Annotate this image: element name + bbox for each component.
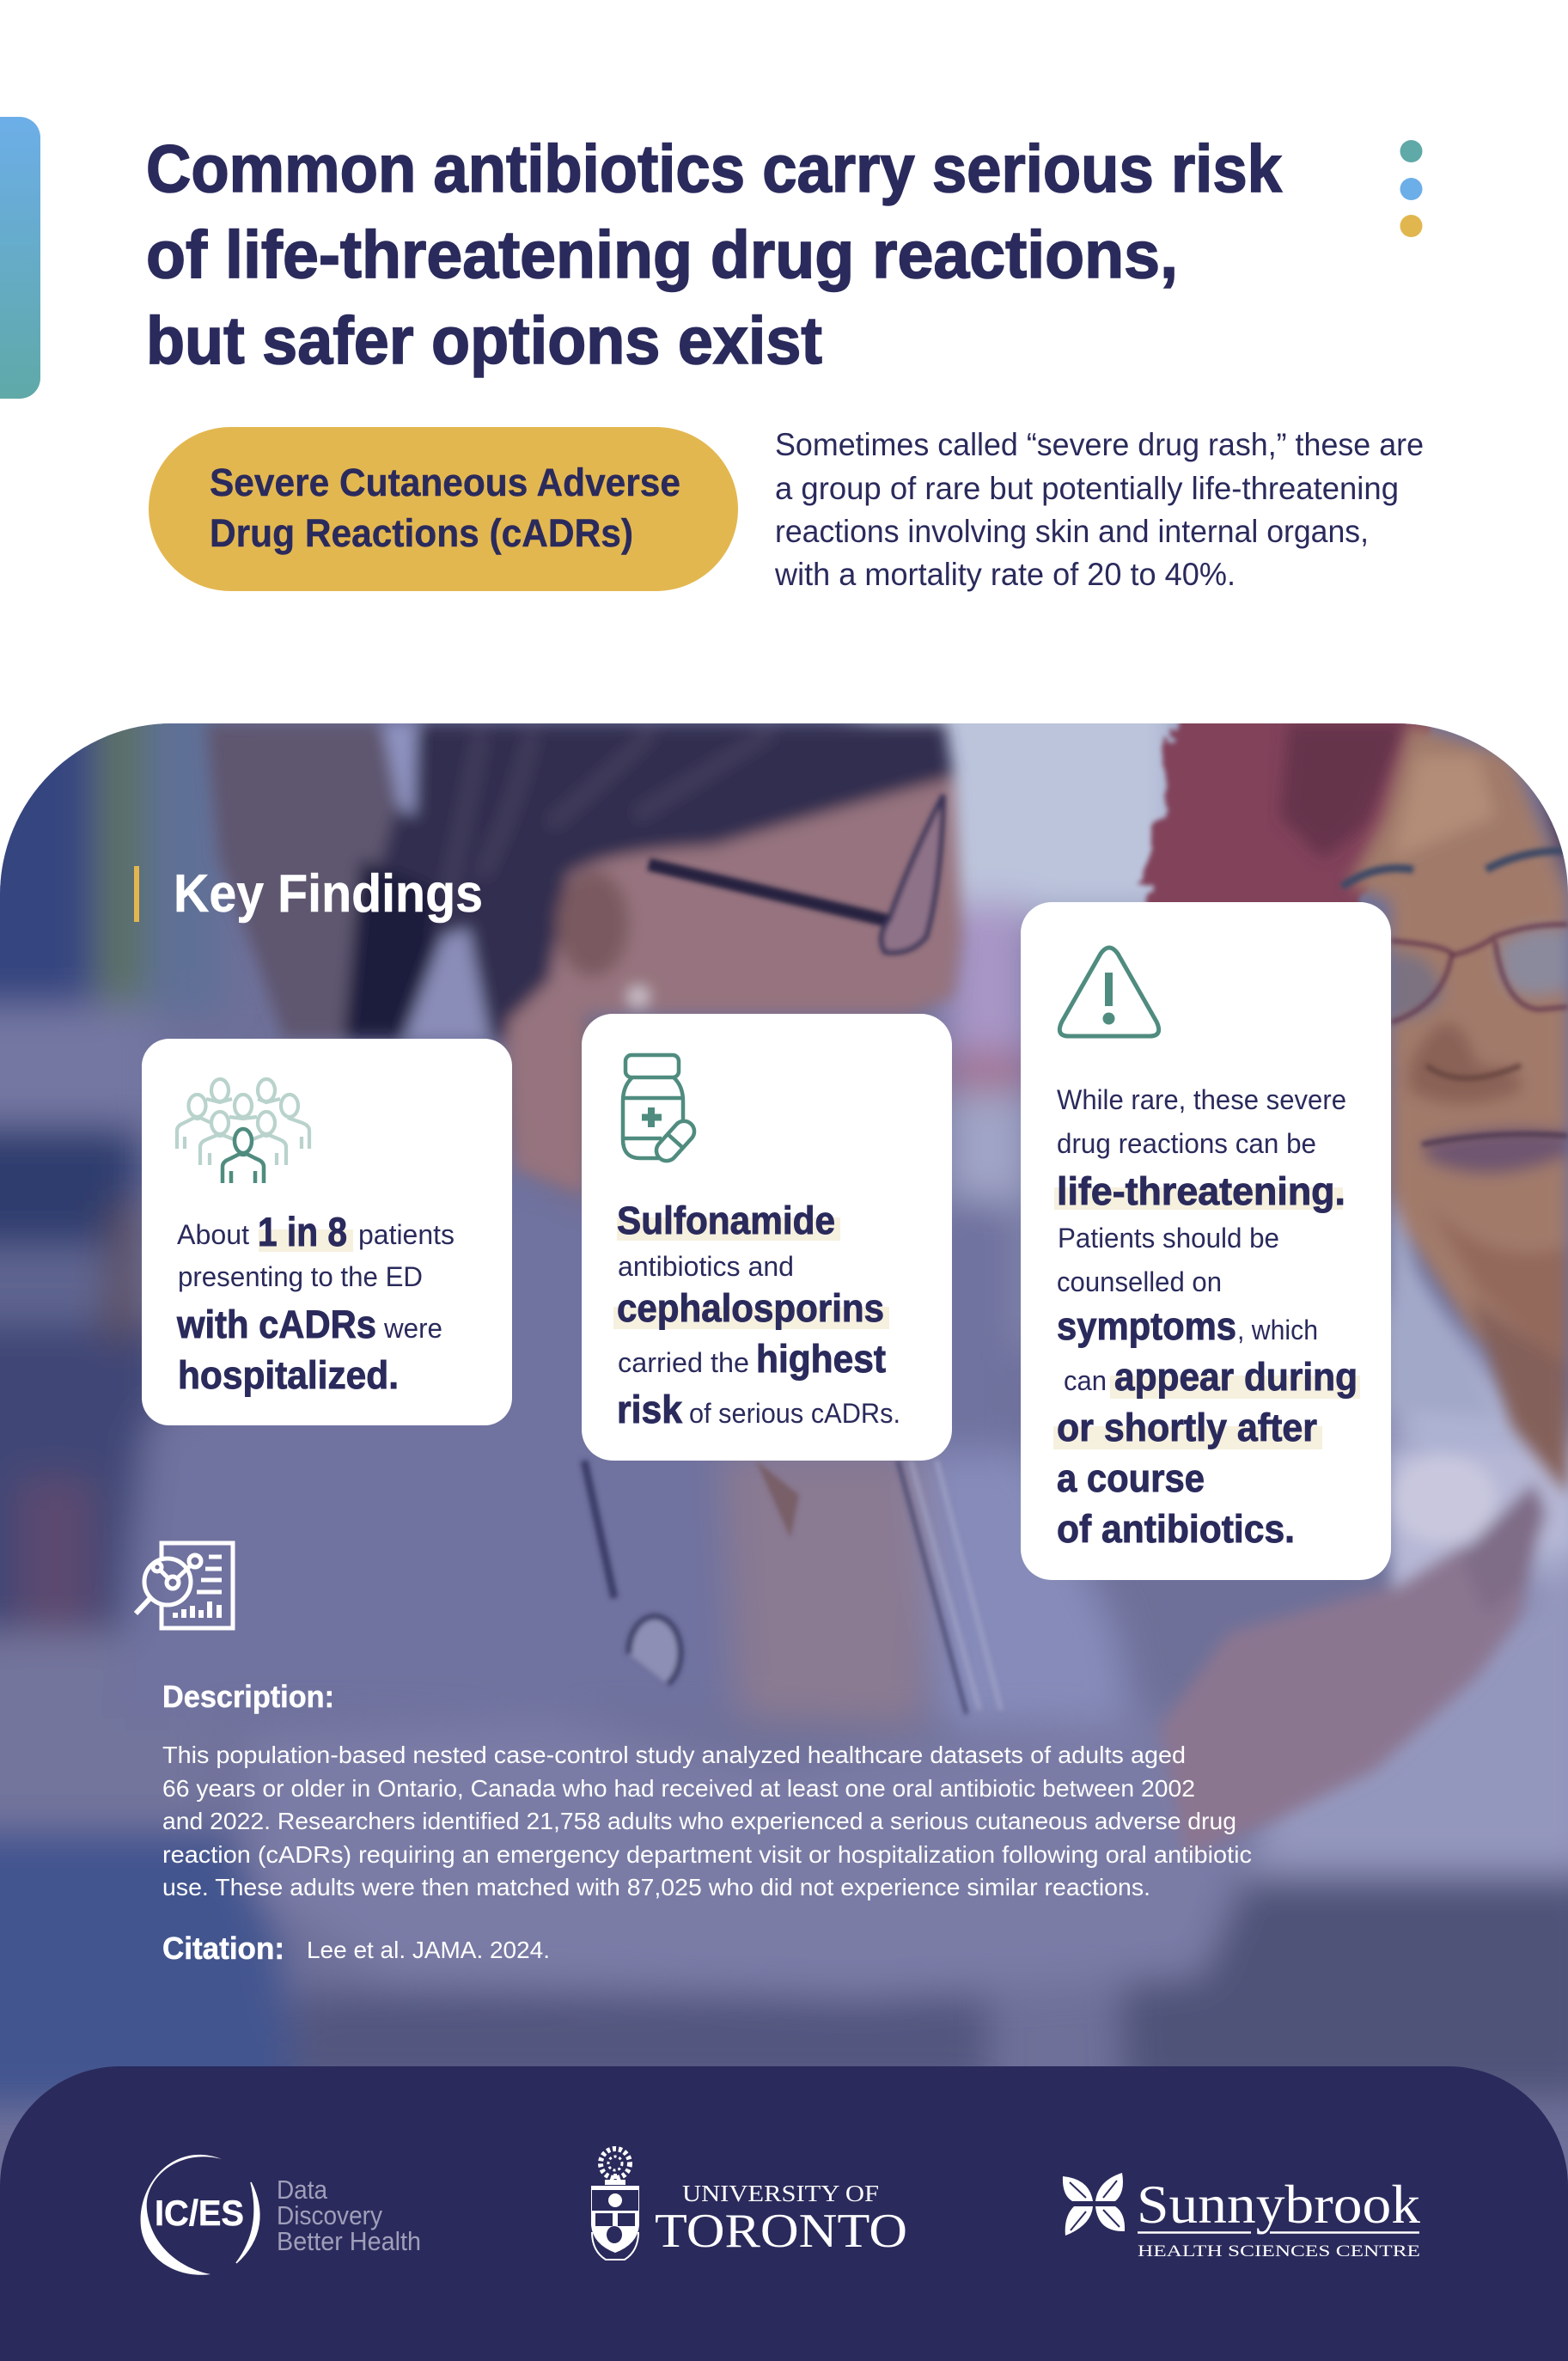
text: sulfonamide and cephalosporins (613, 1199, 900, 1431)
photo detail: hand holding bottle (1160, 1452, 1568, 1856)
text: life-threatening guidance: life-threatening. (1057, 1169, 1345, 1213)
text: sulfonamide and cephalosporins: highest (756, 1337, 886, 1381)
icon: report with magnifier (136, 1543, 233, 1628)
photo detail: patient red hair (1136, 723, 1431, 902)
text: life-threatening guidance: a course (1057, 1456, 1205, 1500)
text: life-threatening guidance: or shortly after (1057, 1406, 1317, 1449)
panel: card 2 - sulfonamide (582, 1014, 952, 1461)
text block: citation: Citation: (162, 1931, 284, 1966)
text: sulfonamide and cephalosporins: antibiotics and (618, 1251, 794, 1282)
text: 1 in 8: 1 in 8 (258, 1209, 347, 1254)
leaves (1063, 2173, 1125, 2236)
text: sulfonamide and cephalosporins: carried the (618, 1347, 749, 1378)
text block: description: use. These adults were then matched with 87,025 who did not experience similar reactions. (162, 1874, 1150, 1900)
background photo: nurse and patient (0, 723, 1568, 2186)
text: life-threatening guidance: drug reactions can be (1057, 1128, 1316, 1159)
definition text (774, 427, 1424, 592)
photo detail: patient face (1349, 723, 1568, 1495)
logo: University of Toronto (591, 2149, 907, 2260)
photo detail: stethoscope and coat (584, 1461, 1001, 1714)
icon: group of people (177, 1079, 309, 1183)
title: Common antibiotics carry serious risk (146, 131, 1283, 206)
text: sulfonamide and cephalosporins: of serious cADRs. (689, 1398, 900, 1429)
text: life-threatening guidance: can (1064, 1365, 1107, 1396)
logo: Sunnybrook (1063, 2173, 1420, 2260)
definition text: Sometimes called “severe drug rash,” these are (775, 427, 1424, 462)
callout pill: Severe Cutaneous Adverse Drug Reactions: Severe Cutaneous Adverse (210, 461, 680, 504)
text block: description: and 2022. Researchers identified 21,758 adults who experienced a serious cutaneous adverse drug (162, 1808, 1236, 1834)
text: life-threatening guidance: While rare, these severe (1057, 1084, 1346, 1115)
left accent tab (0, 117, 40, 399)
text: life-threatening guidance: counselled on (1057, 1266, 1222, 1297)
logo: University of Toronto: UNIVERSITY OF (682, 2181, 879, 2206)
definition text: reactions involving skin and internal organs, (775, 514, 1369, 549)
logo: IC/ES: Better Health (277, 2226, 421, 2256)
three decorative dots (1400, 140, 1423, 237)
logo: Sunnybrook: Sunnybrook (1137, 2174, 1420, 2235)
definition text: with a mortality rate of 20 to 40%. (774, 557, 1235, 592)
logo: IC/ES: Discovery (277, 2200, 382, 2230)
text: 1 in 8: were (383, 1313, 442, 1344)
definition text: a group of rare but potentially life-threatening (775, 471, 1399, 506)
text: life-threatening guidance: appear during (1114, 1355, 1358, 1399)
text block: description: Description: (162, 1679, 334, 1714)
text: 1 in 8 (176, 1209, 455, 1397)
heading: Key Findings: Key Findings (174, 864, 483, 924)
footer band (0, 2066, 1568, 2361)
text: 1 in 8: hospitalized. (178, 1353, 399, 1397)
title: but safer options exist (146, 302, 822, 378)
text: 1 in 8: About (177, 1219, 249, 1250)
text block: citation (162, 1931, 550, 1966)
icon: pill bottle (623, 1055, 699, 1165)
crest (591, 2149, 639, 2260)
photo detail: nurse hair and face (206, 723, 962, 1194)
text: 1 in 8: with cADRs (176, 1303, 376, 1346)
logo: IC/ES: Data (277, 2175, 328, 2205)
text: sulfonamide and cephalosporins: risk (617, 1388, 683, 1431)
text: 1 in 8: presenting to the ED (178, 1261, 423, 1292)
icon: warning triangle (1059, 948, 1159, 1036)
panel: card 1 - 1 in 8 patients (142, 1039, 512, 1425)
title: of life-threatening drug reactions, (146, 217, 1178, 292)
text block: description: 66 years or older in Ontario, Canada who had received at least one oral antibiotic between 2002 (162, 1775, 1195, 1802)
photo detail: glasses (649, 795, 943, 953)
logo: IC/ES (141, 2155, 421, 2275)
logo: IC/ES: IC/ES (155, 2193, 244, 2233)
logo: University of Toronto: TORONTO (655, 2205, 907, 2258)
text block: description: This population-based nested case-control study analyzed healthcare datasets of adults aged (162, 1742, 1186, 1768)
logo: Sunnybrook: HEALTH SCIENCES CENTRE (1138, 2243, 1420, 2260)
panel: card 3 - life-threatening (1021, 902, 1391, 1580)
text: sulfonamide and cephalosporins: cephalosporins (617, 1286, 884, 1330)
text block: description (162, 1679, 1252, 1900)
text: 1 in 8: patients (358, 1219, 455, 1250)
title (146, 131, 1283, 378)
text block: citation: Lee et al. JAMA. 2024. (307, 1937, 550, 1963)
text: sulfonamide and cephalosporins: Sulfonamide (617, 1199, 835, 1242)
text: life-threatening guidance: , which (1237, 1315, 1318, 1345)
text: life-threatening guidance: symptoms (1057, 1304, 1236, 1348)
text: life-threatening guidance: of antibiotics. (1057, 1507, 1295, 1551)
callout pill: Severe Cutaneous Adverse Drug Reactions: Drug Reactions (cADRs) (210, 511, 633, 555)
text: life-threatening guidance: Patients should be (1058, 1223, 1279, 1254)
text: life-threatening guidance (1053, 1084, 1360, 1551)
callout pill: Severe Cutaneous Adverse Drug Reactions (149, 427, 738, 591)
text block: description: reaction (cADRs) requiring an emergency department visit or hospitalization following oral antibiotic (162, 1841, 1252, 1868)
